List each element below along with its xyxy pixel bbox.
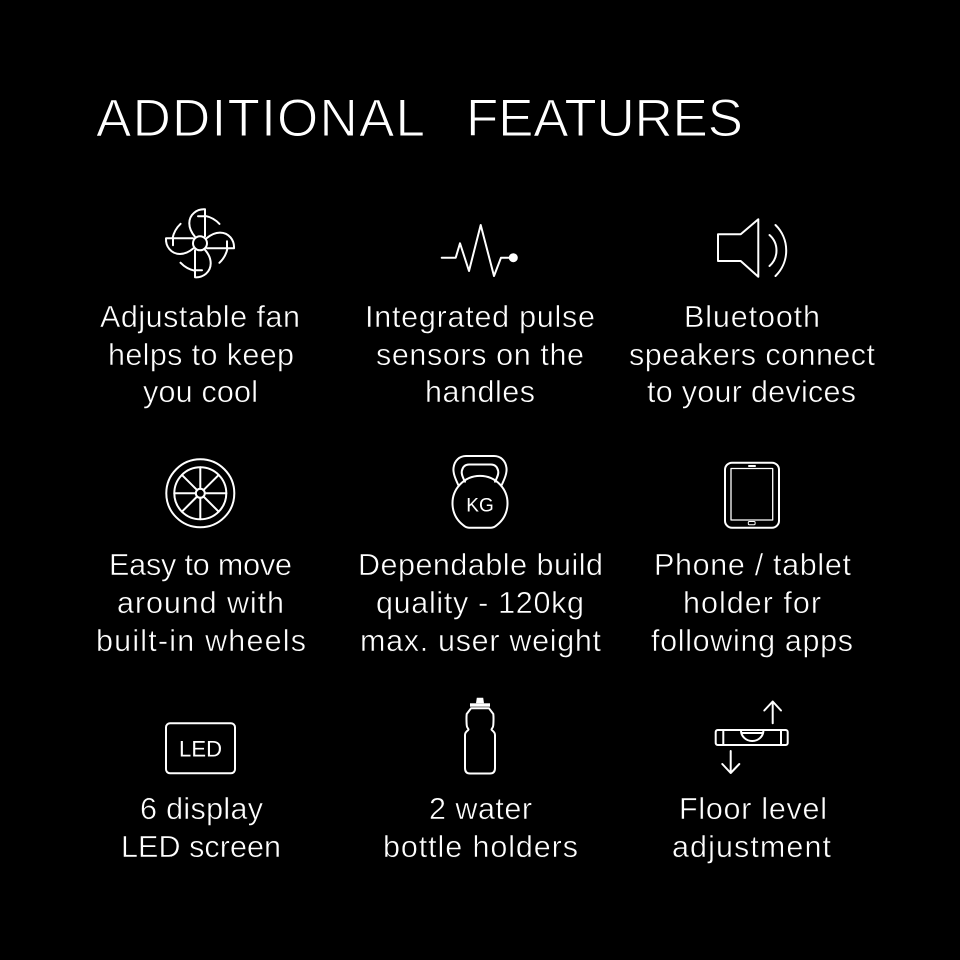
icon: led (166, 723, 235, 773)
text: water bottle holders (383, 792, 578, 864)
text: wheels: around with (117, 586, 284, 620)
icon: led: LED (179, 737, 222, 762)
text: tablet holder: holder for (683, 586, 821, 620)
panel: water bottle holders (383, 698, 578, 864)
panel: pulse sensors (365, 225, 595, 409)
text: bluetooth speakers: speakers connect (629, 338, 876, 372)
text: adjustable fan (100, 300, 300, 409)
text: tablet holder (651, 548, 853, 658)
icon: bottle (465, 698, 495, 774)
panel: wheels (96, 459, 306, 658)
text: water bottle holders: 2 water (429, 792, 532, 826)
text: wheels (96, 548, 306, 658)
text: build quality: quality - 120kg (376, 586, 584, 620)
text: wheels: Easy to move (109, 548, 292, 582)
text: led screen: 6 display (140, 792, 264, 826)
text: build quality: max. user weight (360, 624, 602, 658)
text: pulse sensors: sensors on the (376, 338, 584, 372)
icon: speaker (718, 219, 786, 277)
text: build quality: Dependable build (358, 548, 603, 582)
text: bluetooth speakers (629, 300, 876, 409)
icon: kettlebell: KG (466, 496, 494, 516)
title: FEATURES (466, 89, 743, 148)
text: floor level (672, 792, 832, 864)
panel: build quality (358, 456, 603, 658)
text: led screen: LED screen (121, 830, 281, 864)
text: adjustable fan: you cool (143, 375, 258, 409)
text: adjustable fan: Adjustable fan (100, 300, 300, 334)
panel: adjustable fan (100, 209, 300, 409)
text: wheels: built-in wheels (96, 624, 306, 658)
icon: tablet (725, 463, 779, 528)
text: adjustable fan: helps to keep (108, 338, 294, 372)
panel: floor level (672, 702, 832, 864)
icon: pulse (442, 225, 518, 276)
text: floor level: Floor level (679, 792, 827, 826)
text: pulse sensors (365, 300, 595, 409)
text: bluetooth speakers: to your devices (647, 375, 856, 409)
panel: led screen (121, 723, 281, 864)
text: pulse sensors: handles (425, 375, 535, 409)
text: bluetooth speakers: Bluetooth (684, 300, 820, 334)
text: build quality (358, 548, 603, 658)
icon: spirit level with arrows (716, 702, 788, 773)
text: tablet holder: following apps (651, 624, 853, 658)
text: floor level: adjustment (672, 830, 832, 864)
icon: kettlebell (453, 456, 507, 528)
icon: wheel (166, 459, 234, 527)
title (96, 89, 743, 148)
text: tablet holder: Phone / tablet (654, 548, 852, 582)
text: water bottle holders: bottle holders (383, 830, 578, 864)
panel: bluetooth speakers (629, 219, 876, 409)
title: ADDITIONAL (96, 89, 425, 148)
text: pulse sensors: Integrated pulse (365, 300, 595, 334)
icon: fan (166, 209, 234, 277)
text: led screen (121, 792, 281, 864)
panel: tablet holder (651, 463, 853, 658)
